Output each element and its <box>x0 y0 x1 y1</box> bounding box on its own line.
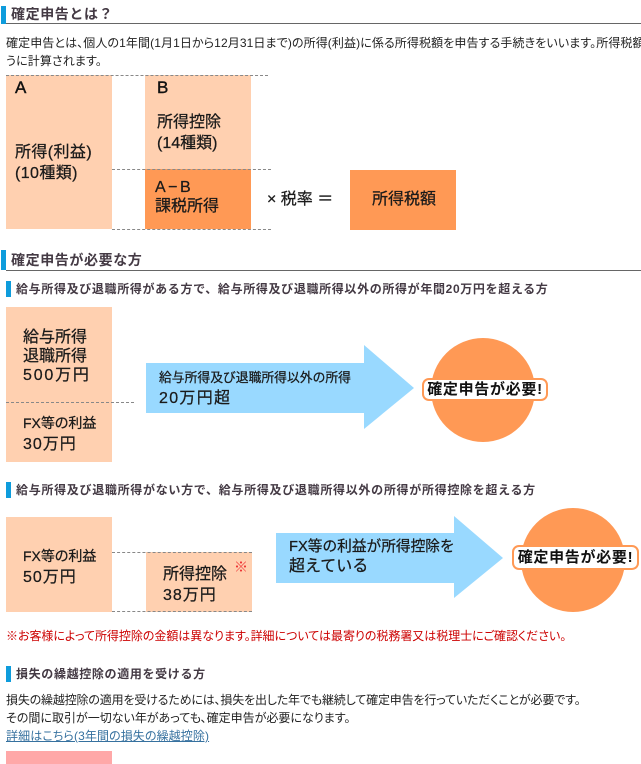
heading: who needs to file: 確定申告が必要な方 <box>11 252 142 268</box>
loss carryforward paragraph <box>6 693 580 725</box>
box B: income deduction: B <box>157 78 168 97</box>
formula: times tax rate equals: × 税率 ＝ <box>267 191 333 208</box>
arrow: FX profit exceeds deduction: 超えている <box>289 558 368 575</box>
box: income tax amount: 所得税額 <box>372 191 436 208</box>
box: salary and FX income <box>6 307 112 462</box>
box: salary and FX income: 退職所得 <box>23 348 87 365</box>
box A-B: taxable income: A−B <box>155 179 193 196</box>
box A: income: (10種類) <box>15 165 78 182</box>
circle: filing required <box>512 508 639 612</box>
diagram: tax calculation <box>6 75 456 230</box>
box: salary and FX income: 500万円 <box>23 367 91 384</box>
box A: income: 所得(利益) <box>15 144 92 161</box>
box: salary and FX income: 給与所得 <box>23 329 87 346</box>
box B: income deduction: (14種類) <box>157 135 217 152</box>
box A: income: A <box>15 78 26 97</box>
pink box <box>6 751 112 764</box>
box: FX profit: FX等の利益 <box>23 548 96 564</box>
box A-B: taxable income <box>145 169 251 229</box>
arrow: other income over 200k yen: 給与所得及び退職所得以外の所得 <box>159 370 351 385</box>
box: income deduction: 所得控除 <box>163 566 227 583</box>
circle: filing required: 確定申告が必要! <box>427 381 543 398</box>
arrow: other income over 200k yen <box>146 345 414 429</box>
arrow: other income over 200k yen: 20万円超 <box>159 390 231 407</box>
circle: filing required <box>422 338 548 442</box>
subheading: case with salary income: 給与所得及び退職所得がある方で、給与所得及び退職所得以外の所得が年間20万円を超える方 <box>16 282 548 296</box>
red note: ※お客様によって所得控除の金額は異なります。詳細については最寄りの税務署又は税理士にご確認ください。 <box>6 629 566 643</box>
intro paragraph: うに計算されます。 <box>6 54 102 68</box>
heading: what is final tax return: 確定申告とは？ <box>11 6 113 22</box>
box: income deduction: 38万円 <box>163 587 217 604</box>
box: income deduction <box>146 552 252 612</box>
note mark: ※ <box>234 559 248 575</box>
heading: what is final tax return <box>1 6 641 24</box>
circle: filing required: 確定申告が必要! <box>518 549 633 566</box>
box B: income deduction <box>145 75 251 169</box>
box B: income deduction: 所得控除 <box>157 114 221 131</box>
subheading: case without salary income: 給与所得及び退職所得がない方で、給与所得及び退職所得以外の所得が所得控除を超える方 <box>16 483 536 497</box>
link: details: 詳細はこちら(3年間の損失の繰越控除) <box>6 729 209 743</box>
box A-B: taxable income: 課税所得 <box>155 198 219 215</box>
subheading: loss carryforward: 損失の繰越控除の適用を受ける方 <box>16 667 206 681</box>
box: income tax amount <box>350 170 456 230</box>
loss carryforward paragraph: 損失の繰越控除の適用を受けるためには、損失を出した年でも継続して確定申告を行っていただくことが必要です。 <box>6 693 580 707</box>
case 1 diagram <box>6 307 548 462</box>
box A: income <box>6 75 112 229</box>
box: salary and FX income: 30万円 <box>23 436 77 453</box>
arrow: FX profit exceeds deduction: FX等の利益が所得控除を <box>289 539 455 555</box>
heading: who needs to file <box>1 250 641 271</box>
box: FX profit <box>6 517 112 612</box>
case 2 diagram <box>6 508 639 612</box>
box: FX profit: 50万円 <box>23 569 77 586</box>
box: salary and FX income: FX等の利益 <box>23 415 96 431</box>
loss carryforward paragraph: その間に取引が一切ない年があっても、確定申告が必要になります。 <box>6 711 350 725</box>
arrow: FX profit exceeds deduction <box>276 516 503 598</box>
intro paragraph <box>6 36 641 68</box>
